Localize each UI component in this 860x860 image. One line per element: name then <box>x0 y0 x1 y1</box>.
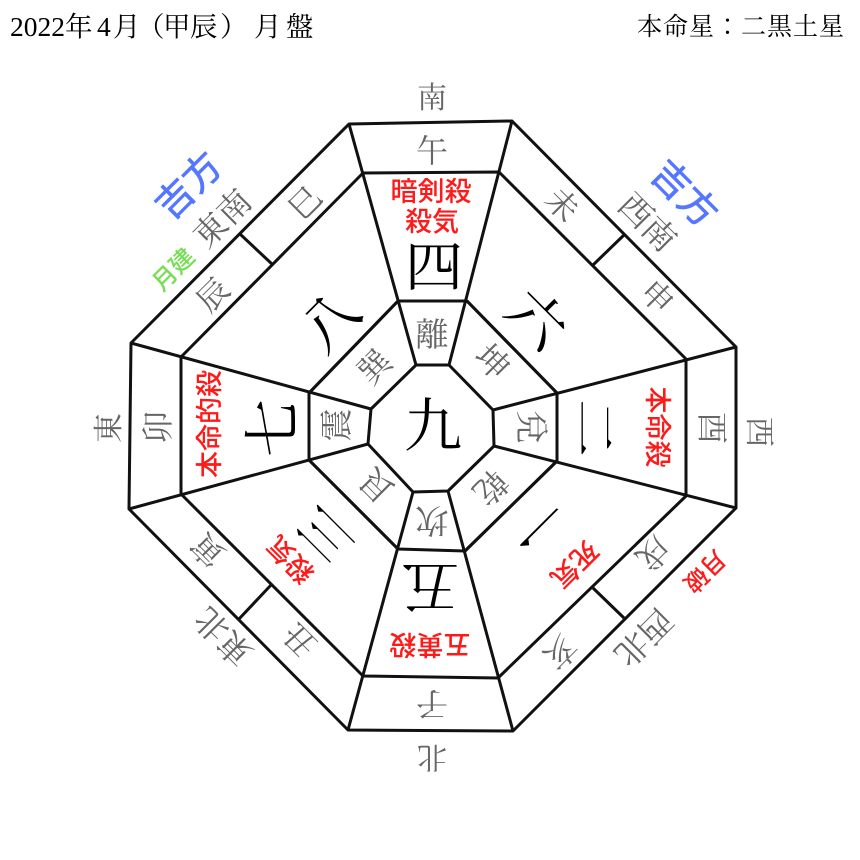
direction label: south: 南 <box>417 82 447 115</box>
zodiac ring labels: 巳 <box>281 179 329 227</box>
red warnings: 本命的殺 <box>195 370 225 478</box>
heading: main star: 本命星：二黒土星 <box>637 13 844 41</box>
star numbers: 一 <box>492 480 579 567</box>
direction label: east: 東 <box>93 413 126 443</box>
octagon frame <box>129 121 736 731</box>
star numbers: 九 <box>404 394 462 459</box>
star numbers: 五 <box>401 553 459 618</box>
direction label: west: 西 <box>742 417 775 447</box>
trigram ring labels: 離 <box>416 317 448 354</box>
zodiac ring labels: 午 <box>416 133 448 169</box>
red warnings <box>195 177 672 659</box>
direction label: southwest: 西南 <box>611 187 683 259</box>
direction label: north: 北 <box>417 740 447 773</box>
zodiac ring labels: 辰 <box>189 271 237 319</box>
star numbers: 二 <box>568 399 618 457</box>
direction label: northeast: 東北 <box>188 600 260 672</box>
zodiac ring labels: 寅 <box>183 525 232 574</box>
zodiac ring labels: 戌 <box>629 529 677 577</box>
lucky direction southwest: 吉方 <box>642 153 725 236</box>
chart: octagonal direction board <box>93 82 775 773</box>
zodiac ring labels: 酉 <box>694 412 730 444</box>
zodiac ring labels: 卯 <box>140 411 176 443</box>
red warnings: 暗剣殺 <box>390 177 472 207</box>
title: 2022年4月（甲辰）月盤 <box>10 11 314 42</box>
red warnings: 殺気 <box>405 207 459 237</box>
direction label: northwest: 西北 <box>607 601 679 673</box>
lucky direction southeast: 吉方 <box>148 145 231 228</box>
zodiac ring labels: 未 <box>538 181 586 229</box>
trigram ring labels: 艮 <box>353 460 402 509</box>
star numbers: 八 <box>288 279 375 366</box>
trigram ring labels: 震 <box>320 408 356 442</box>
trigram ring labels <box>320 317 549 538</box>
zodiac ring labels <box>140 133 730 722</box>
red warnings: 殺気 <box>261 530 320 589</box>
trigram ring labels: 坤 <box>467 338 516 387</box>
zodiac ring labels: 申 <box>633 273 681 321</box>
star numbers: 四 <box>405 235 463 300</box>
trigram ring labels: 乾 <box>465 462 514 511</box>
trigram ring labels: 坎 <box>416 501 448 538</box>
red warnings: 五黄殺 <box>390 629 470 659</box>
zodiac ring labels: 亥 <box>536 628 584 676</box>
zodiac ring labels: 子 <box>416 686 448 722</box>
star numbers <box>241 235 618 618</box>
direction label: southeast: 東南 <box>187 183 259 255</box>
star numbers: 七 <box>241 399 306 457</box>
zodiac ring labels: 丑 <box>276 616 324 664</box>
red warnings: 本命殺 <box>642 386 672 468</box>
month marker: geppa: 月破 <box>677 544 730 597</box>
red warnings: 死気 <box>545 535 604 594</box>
month marker: gekken: 月建 <box>148 244 201 297</box>
trigram ring labels: 巽 <box>351 343 401 392</box>
star numbers: 六 <box>492 277 580 364</box>
trigram ring labels: 兌 <box>512 410 549 444</box>
star numbers: 三 <box>288 496 364 572</box>
